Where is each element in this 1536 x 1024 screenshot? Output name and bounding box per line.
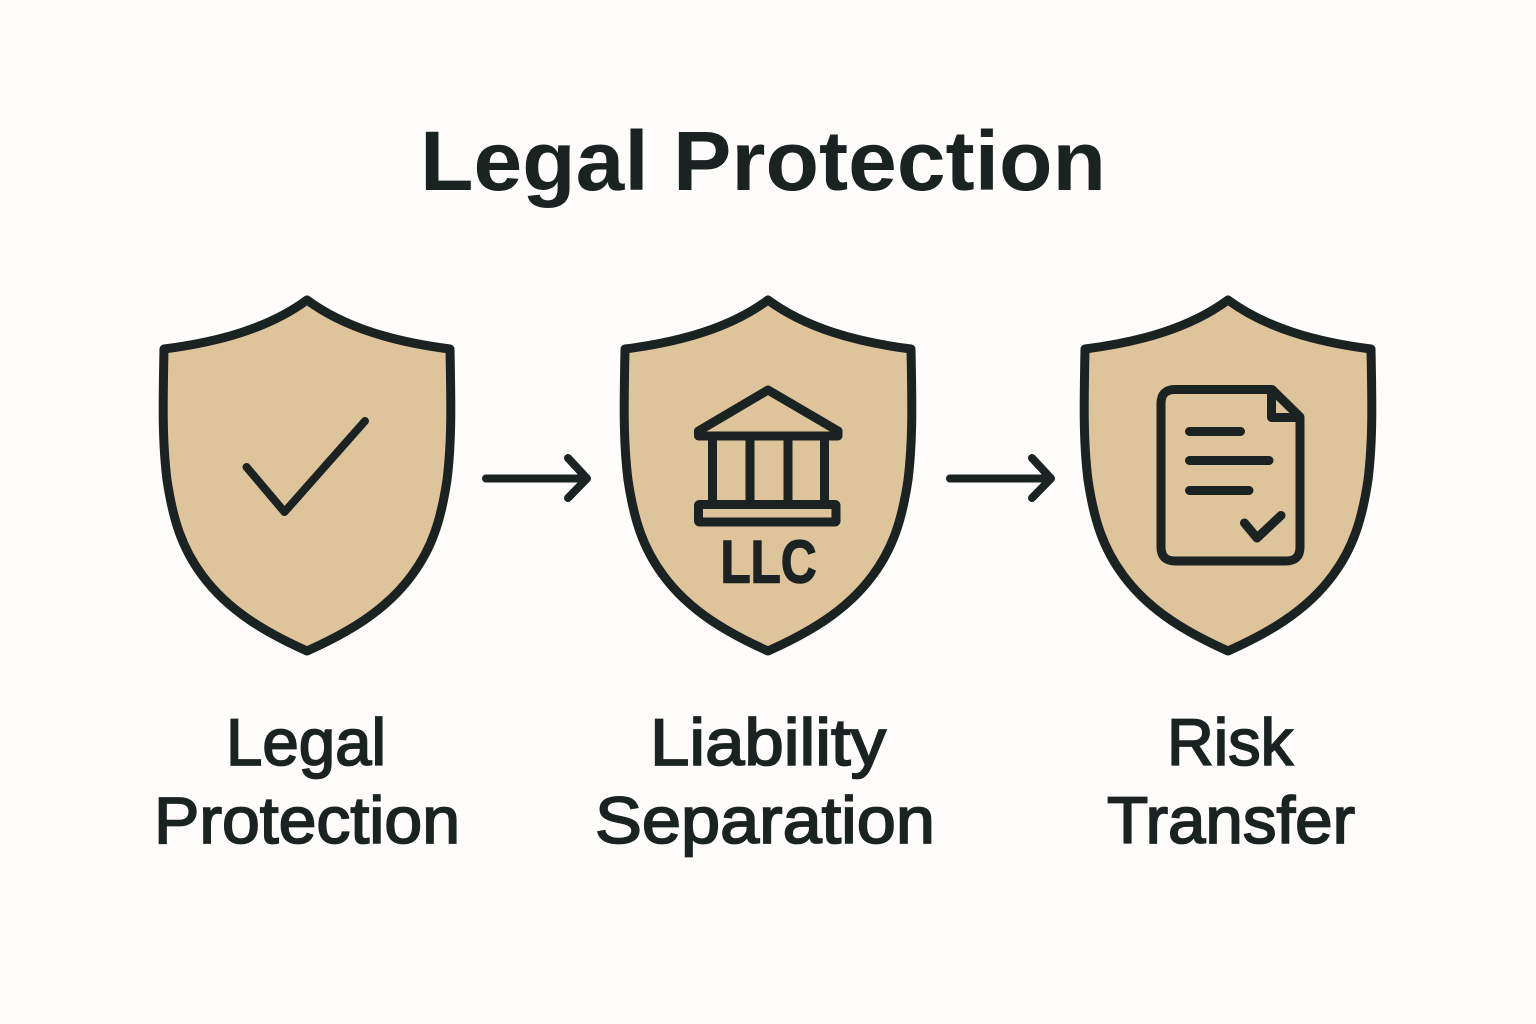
LLC label: LLC — [720, 528, 816, 596]
arrow 2 — [950, 458, 1051, 498]
title: Legal Protection — [420, 114, 1106, 208]
label: legal protection: Legal — [226, 705, 386, 779]
icon: courthouse — [698, 390, 838, 522]
label: legal protection — [154, 705, 460, 857]
shield 3: risk transfer — [1084, 300, 1372, 651]
shield 2: liability separation — [624, 300, 912, 651]
label: risk transfer — [1107, 705, 1355, 857]
label: liability separation — [595, 705, 935, 857]
label: legal protection: Protection — [154, 783, 460, 857]
arrow 1 — [486, 458, 587, 498]
label: risk transfer: Risk — [1167, 705, 1294, 779]
label: risk transfer: Transfer — [1107, 783, 1355, 857]
shield 1: legal protection — [163, 300, 451, 651]
icon: check mark — [246, 421, 365, 512]
icon: document with check — [1161, 390, 1300, 561]
label: liability separation: Separation — [595, 783, 935, 857]
label: liability separation: Liability — [650, 705, 886, 779]
